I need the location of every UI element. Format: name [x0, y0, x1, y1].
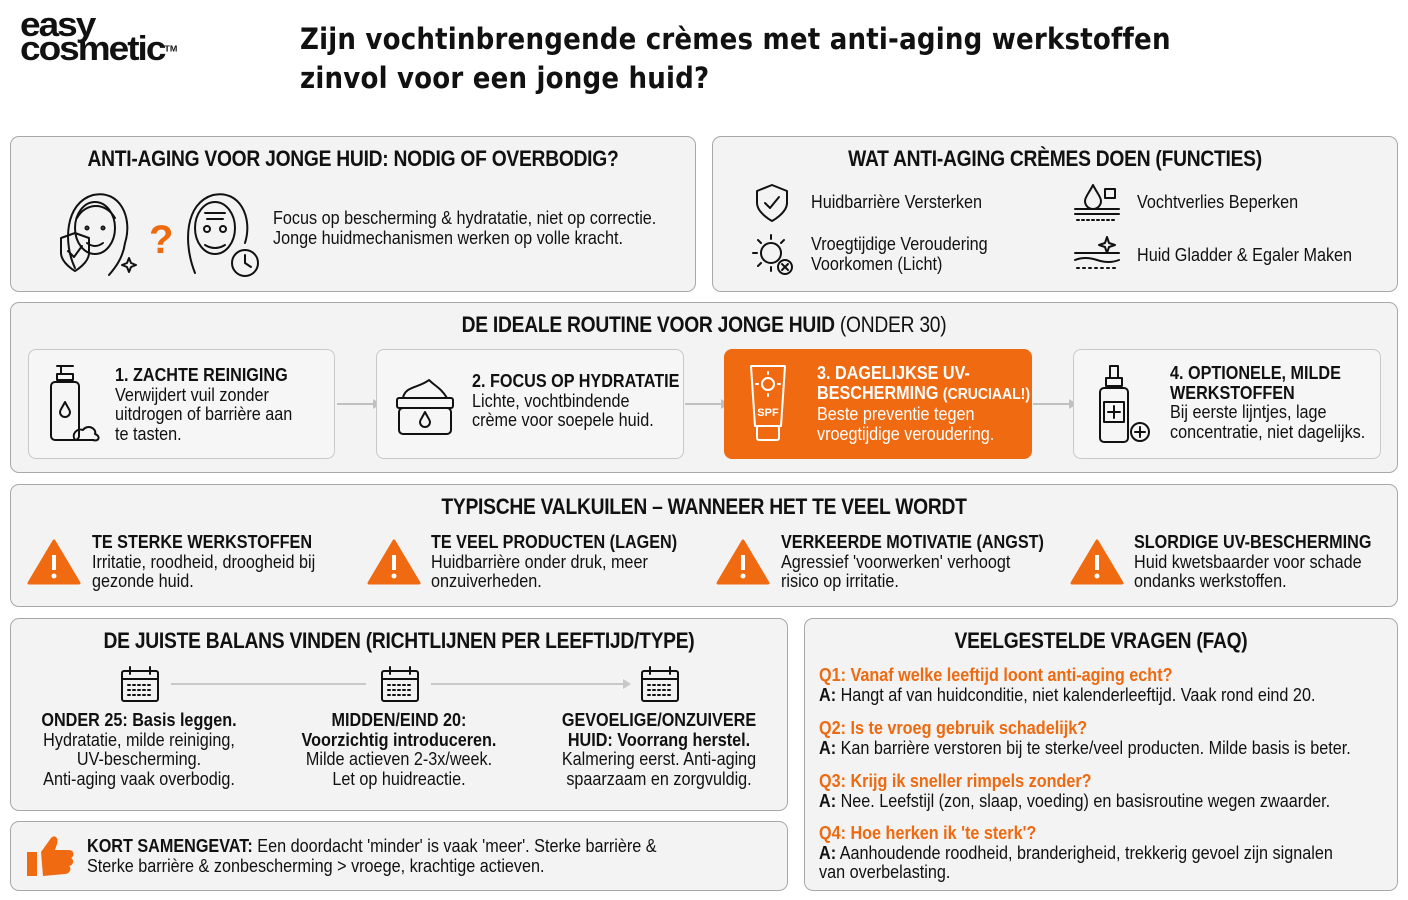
faq 1: Q1: Vanaf welke leeftijd loont anti-aging echt?	[819, 664, 1172, 685]
text: Hydratatie, milde reiniging,	[43, 728, 235, 750]
text: Huidbarrière onder druk, meer	[431, 550, 648, 572]
logo: easy	[20, 6, 94, 43]
icon: calendar	[121, 666, 159, 702]
icon: thumbs up	[27, 834, 75, 878]
text: Anti-aging vaak overbodig.	[43, 768, 235, 788]
heading: TYPISCHE VALKUILEN – WANNEER HET TE VEEL WORDT	[441, 494, 967, 519]
text	[781, 531, 1044, 591]
text: HUID: Voorrang herstel.	[568, 728, 750, 750]
text: GEVOELIGE/ONZUIVERE	[562, 709, 756, 730]
text: te tasten.	[115, 422, 182, 444]
text	[811, 233, 988, 274]
icon: young and old faces	[60, 193, 259, 277]
text	[472, 370, 679, 430]
icon: calendar	[381, 666, 419, 702]
text: Agressief 'voorwerken' verhoogt	[781, 550, 1010, 572]
arrow	[685, 399, 724, 409]
icon: drop lock	[1074, 184, 1120, 221]
text: Sterke barrière & zonbescherming > vroege, krachtige actieven.	[87, 854, 545, 876]
text	[1134, 531, 1371, 591]
panel: valkuilen	[10, 484, 1398, 607]
heading: ANTI-AGING VOOR JONGE HUID: NODIG OF OVERBODIG?	[88, 146, 618, 171]
column 2	[302, 666, 496, 789]
text	[87, 836, 657, 875]
faq 3: A: Nee. Leefstijl (zon, slaap, voeding) en basisroutine wegen zwaarder.	[819, 790, 1330, 810]
heading: VEELGESTELDE VRAGEN (FAQ)	[955, 628, 1247, 653]
icon: spf tube: SPF	[757, 407, 779, 419]
faq 3: Q3: Krijg ik sneller rimpels zonder?	[819, 770, 1092, 791]
logo	[20, 6, 177, 67]
icon: warning	[1070, 539, 1124, 584]
text: 2. FOCUS OP HYDRATATIE	[472, 370, 679, 391]
faq 2: Q2: Is te vroeg gebruik schadelijk?	[819, 717, 1087, 738]
text: Milde actieven 2-3x/week.	[306, 748, 492, 769]
panel: FAQ	[804, 618, 1398, 891]
timeline arrows	[171, 679, 631, 689]
icon: calendar	[640, 665, 680, 703]
text	[115, 364, 292, 444]
text: WERKSTOFFEN	[1170, 382, 1295, 402]
text: UV-bescherming.	[77, 748, 201, 769]
text: Beste preventie tegen	[817, 403, 974, 424]
panel: nodig of overbodig	[10, 136, 696, 292]
faq 4: Q4: Hoe herken ik 'te sterk'?	[819, 822, 1036, 843]
panel: balans	[10, 618, 788, 811]
faq 4	[819, 823, 1333, 882]
text: spaarzaam en zorgvuldig.	[566, 768, 752, 788]
text: TE STERKE WERKSTOFFEN	[92, 531, 312, 552]
heading: DE IDEALE ROUTINE VOOR JONGE HUID (ONDER 30)	[462, 312, 946, 337]
heading: WAT ANTI-AGING CRÈMES DOEN (FUNCTIES)	[848, 146, 1262, 171]
title: Zijn vochtinbrengende crèmes met anti-aging werkstoffen	[300, 22, 1171, 56]
icon: warning	[368, 539, 421, 584]
text: Irritatie, roodheid, droogheid bij	[92, 550, 315, 572]
text	[302, 709, 496, 789]
text: Huid kwetsbaarder voor schade	[1134, 550, 1362, 572]
icon: pump bottle	[50, 365, 100, 442]
text: SLORDIGE UV-BESCHERMING	[1134, 531, 1371, 552]
text: Huid Gladder & Egaler Maken	[1137, 244, 1352, 265]
icon: warning	[28, 539, 81, 584]
faq 4: van overbelasting.	[819, 861, 950, 882]
card 2	[376, 349, 684, 459]
faq 2	[819, 718, 1351, 757]
icon: dropper bottle	[1099, 365, 1150, 443]
faq 2: A: Kan barrière verstoren bij te sterke/veel producten. Milde basis is beter.	[819, 736, 1351, 758]
faq 1: A: Hangt af van huidconditie, niet kalenderleeftijd. Vaak rond eind 20.	[819, 684, 1315, 704]
text: BESCHERMING (CRUCIAAL!)	[817, 382, 1030, 402]
icon: sparkle skin	[1074, 236, 1120, 269]
text: Jonge huidmechanismen werken op volle kracht.	[273, 226, 623, 248]
pitfall 1	[28, 531, 315, 591]
text: Let op huidreactie.	[332, 768, 466, 788]
icon: sun cross	[752, 234, 793, 275]
text: uitdrogen of barrière aan	[115, 403, 292, 424]
text: KORT SAMENGEVAT: Een doordacht 'minder' is vaak 'meer'. Sterke barrière &	[87, 835, 657, 856]
heading: DE JUISTE BALANS VINDEN (RICHTLIJNEN PER LEEFTIJD/TYPE)	[104, 628, 694, 653]
text: ondanks werkstoffen.	[1134, 570, 1287, 591]
title: zinvol voor een jonge huid?	[300, 61, 709, 95]
card 4	[1073, 349, 1381, 459]
pitfall 2	[368, 531, 677, 591]
faq 3	[819, 771, 1330, 810]
text: Huidbarrière Versterken	[811, 191, 982, 212]
text: ONDER 25: Basis leggen.	[41, 709, 237, 730]
text: Kalmering eerst. Anti-aging	[562, 748, 756, 769]
text: VERKEERDE MOTIVATIE (ANGST)	[781, 531, 1044, 552]
text: Vochtverlies Beperken	[1137, 191, 1298, 212]
panel: functies	[712, 136, 1398, 292]
panel: samenvatting	[10, 821, 788, 891]
text: risico op irritatie.	[781, 570, 899, 591]
arrow	[337, 399, 376, 409]
faq 4: A: Aanhoudende roodheid, branderigheid, trekkerig gevoel zijn signalen	[819, 842, 1333, 862]
text: Bij eerste lijntjes, lage	[1170, 401, 1327, 422]
text: MIDDEN/EIND 20:	[332, 709, 466, 730]
text: TE VEEL PRODUCTEN (LAGEN)	[431, 531, 677, 552]
icon: spf tube	[750, 365, 786, 441]
text: 3. DAGELIJKSE UV-	[817, 362, 970, 383]
pitfall 3	[716, 531, 1044, 591]
text	[92, 531, 315, 591]
arrow	[1033, 399, 1073, 409]
panel: routine	[10, 302, 1398, 473]
pitfall 4	[1070, 531, 1371, 591]
text: onzuiverheden.	[431, 570, 542, 591]
text: Voorkomen (Licht)	[811, 252, 942, 274]
column 3	[539, 663, 779, 793]
text: Focus op bescherming & hydratatie, niet op correctie.	[273, 207, 656, 228]
text	[554, 710, 764, 788]
card 3 (highlight)	[724, 349, 1032, 459]
text	[1170, 362, 1365, 442]
column 1	[41, 666, 237, 789]
icon: warning	[716, 539, 770, 584]
card 1	[28, 349, 335, 459]
icon: young and old faces: ?	[149, 218, 173, 262]
text: gezonde huid.	[92, 570, 194, 591]
text: Voorzichtig introduceren.	[302, 728, 496, 750]
text: vroegtijdige veroudering.	[817, 422, 994, 444]
logo: cosmeticTM	[20, 30, 177, 67]
text	[41, 709, 237, 789]
text: crème voor soepele huid.	[472, 409, 654, 430]
text: concentratie, niet dagelijks.	[1170, 420, 1365, 442]
text: Vroegtijdige Veroudering	[811, 233, 988, 254]
faq 1	[819, 665, 1315, 704]
text	[817, 362, 1030, 444]
text: Lichte, vochtbindende	[472, 390, 630, 410]
text: 1. ZACHTE REINIGING	[115, 364, 288, 385]
text	[273, 207, 656, 248]
title	[300, 22, 1171, 95]
icon: cream jar	[396, 379, 454, 435]
text: 4. OPTIONELE, MILDE	[1170, 362, 1341, 383]
text: Verwijdert vuil zonder	[115, 384, 269, 404]
icon: shield	[756, 184, 788, 222]
text	[431, 531, 677, 591]
